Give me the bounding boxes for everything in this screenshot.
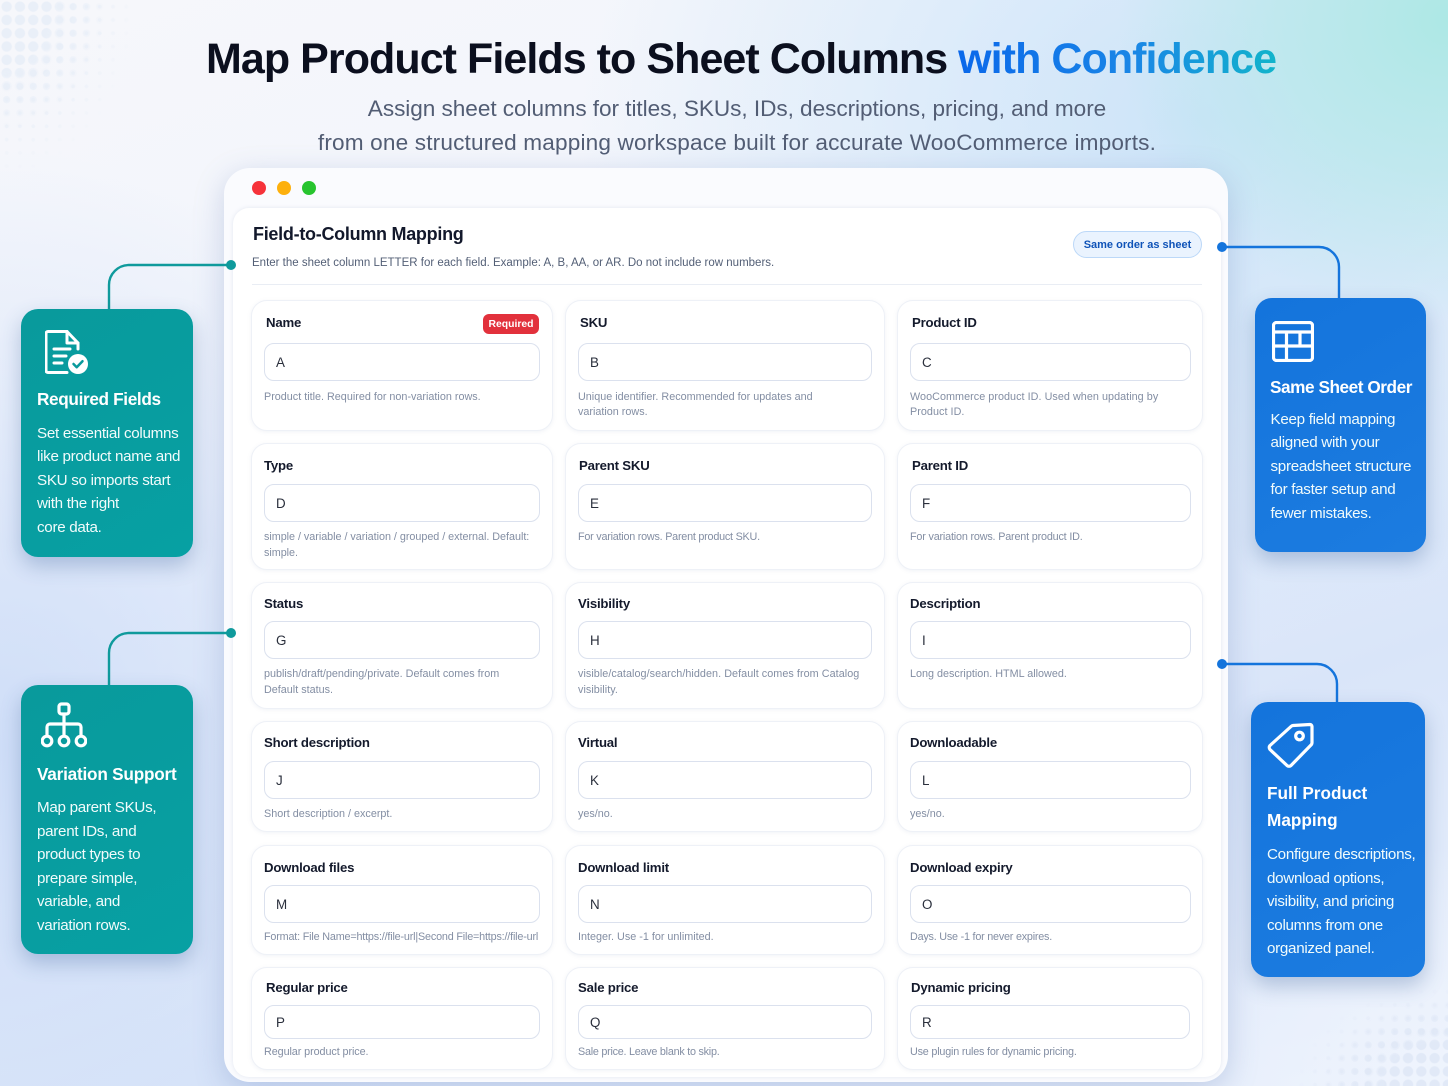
body text: variable, and (37, 893, 120, 910)
input (578, 1005, 872, 1039)
hint (578, 668, 859, 696)
input (578, 885, 872, 923)
field card: Download limit (565, 845, 885, 955)
label: Download limit (578, 860, 669, 875)
label: Sale price (578, 980, 638, 995)
hint: For variation rows. Parent product SKU. (578, 531, 760, 543)
body text: download options, (1267, 870, 1384, 887)
hint: Integer. Use -1 for unlimited. (578, 931, 714, 943)
input: L (922, 772, 929, 788)
body text: visibility, and pricing (1267, 893, 1394, 910)
arrow: same sheet order connector (1217, 242, 1339, 299)
icon: price tag (1268, 722, 1314, 768)
hint: Product title. Required for non-variation rows. (264, 390, 481, 402)
hint: simple / variable / variation / grouped / external. Default: (264, 531, 529, 543)
hint: Use plugin rules for dynamic pricing. (910, 1046, 1077, 1058)
app window (224, 168, 1228, 1082)
badge: same order as sheet (1073, 231, 1202, 258)
hint (578, 390, 813, 418)
input (264, 1005, 540, 1039)
input: A (276, 354, 285, 370)
input (264, 343, 540, 381)
input: I (922, 632, 926, 648)
body text: organized panel. (1267, 940, 1375, 957)
input (910, 484, 1191, 522)
input (578, 621, 872, 659)
input: Q (590, 1014, 600, 1030)
subtitle (318, 96, 1156, 154)
input: F (922, 496, 930, 510)
input (910, 343, 1191, 381)
heading: Variation Support (37, 764, 176, 784)
body text: prepare simple, (37, 870, 137, 887)
input: D (276, 496, 286, 510)
field card: Parent SKU (565, 443, 885, 570)
field card: Sale price (565, 967, 885, 1070)
hint: Default status. (264, 684, 333, 696)
hint: simple. (264, 546, 298, 558)
badge: same order as sheet: Same order as sheet (1084, 239, 1191, 251)
panel instructions: Enter the sheet column LETTER for each field. Example: A, B, AA, or AR. Do not include row numbers. (252, 257, 774, 269)
label: Regular price (266, 980, 348, 995)
body text: Map parent SKUs, (37, 799, 156, 816)
field card: Regular price (251, 967, 553, 1070)
field card: Virtual (565, 721, 885, 832)
label: Short description (264, 735, 370, 750)
body text: like product name and (37, 448, 180, 465)
hint: Days. Use -1 for never expires. (910, 931, 1052, 943)
input (910, 885, 1191, 923)
halftone dots bottom-right (1328, 1016, 1448, 1086)
hint: Unique identifier. Recommended for updates and (578, 390, 813, 402)
icon: document with check (45, 330, 88, 374)
hint (264, 531, 529, 558)
body text: core data. (37, 519, 102, 536)
hint: Long description. HTML allowed. (910, 668, 1067, 680)
input: R (922, 1014, 932, 1030)
hint: yes/no. (578, 808, 613, 820)
arrow: required fields connector (109, 260, 236, 310)
hint: For variation rows. Parent product ID. (910, 531, 1083, 543)
hint: Format: File Name=https://file-url|Second File=https://file-url (264, 931, 538, 943)
input (910, 1005, 1190, 1039)
window control: green (302, 181, 316, 195)
subtitle: Assign sheet columns for titles, SKUs, IDs, descriptions, pricing, and more (368, 96, 1106, 121)
body text: spreadsheet structure (1270, 458, 1411, 475)
heading line 2: Mapping (1267, 810, 1338, 830)
body text: parent IDs, and (37, 823, 136, 840)
body text: fewer mistakes. (1270, 505, 1372, 522)
input: H (590, 632, 600, 648)
field card: SKU (565, 300, 885, 431)
hint: Product ID. (910, 406, 964, 418)
label: Downloadable (910, 735, 997, 750)
body text: Configure descriptions, (1267, 846, 1415, 863)
field card: Name (251, 300, 553, 431)
badge: required (483, 314, 539, 334)
callout: Same Sheet Order (1255, 298, 1426, 552)
badge: required: Required (488, 319, 534, 330)
hint: Short description / excerpt. (264, 808, 392, 820)
field card: Description (897, 582, 1203, 709)
input (578, 761, 872, 799)
hint (264, 668, 499, 696)
arrow: variation support connector (109, 628, 236, 686)
heading: Same Sheet Order (1270, 377, 1412, 397)
icon: hierarchy tree (41, 702, 87, 748)
body text (1267, 846, 1415, 957)
input: P (276, 1014, 285, 1030)
field card: Parent ID (897, 443, 1203, 570)
hint: WooCommerce product ID. Used when updating by (910, 390, 1158, 402)
panel heading: Field-to-Column Mapping (253, 224, 464, 244)
body text: variation rows. (37, 917, 130, 934)
input (264, 885, 540, 923)
field card: Short description (251, 721, 553, 832)
field card: Product ID (897, 300, 1203, 431)
label: Parent ID (912, 458, 968, 473)
input (910, 761, 1191, 799)
body text (1270, 410, 1411, 522)
label: Name (266, 315, 301, 330)
input (264, 484, 540, 522)
field card: Visibility (565, 582, 885, 709)
input: N (590, 896, 600, 912)
label: Download files (264, 860, 354, 875)
heading: Required Fields (37, 389, 161, 409)
hint: Regular product price. (264, 1046, 368, 1058)
label: Type (264, 458, 293, 473)
body text: Set essential columns (37, 424, 178, 442)
hint (910, 390, 1158, 418)
hint: publish/draft/pending/private. Default comes from (264, 668, 499, 680)
label: Download expiry (910, 860, 1013, 875)
body text: for faster setup and (1270, 481, 1395, 498)
input (910, 621, 1191, 659)
body text: with the right (37, 495, 119, 512)
hint: variation rows. (578, 406, 648, 418)
label: Parent SKU (579, 458, 650, 473)
label: SKU (580, 315, 607, 330)
body text: SKU so imports start (37, 472, 170, 489)
input (578, 484, 872, 522)
body text: columns from one (1267, 917, 1383, 934)
hint: visible/catalog/search/hidden. Default comes from Catalog (578, 668, 859, 680)
arrow: full product mapping connector (1217, 659, 1337, 703)
heading: Full Product (1267, 783, 1367, 803)
label: Dynamic pricing (911, 980, 1011, 995)
subtitle: from one structured mapping workspace built for accurate WooCommerce imports. (318, 130, 1156, 154)
window control: amber (277, 181, 291, 195)
field card: Download files (251, 845, 553, 955)
callout: Variation Support (21, 685, 193, 954)
field card: Dynamic pricing (897, 967, 1203, 1070)
halftone dots top-left (2, 2, 102, 128)
body text (37, 799, 156, 934)
field card: Downloadable (897, 721, 1203, 832)
body text: aligned with your (1270, 434, 1379, 451)
field card: Type (251, 443, 553, 570)
hint: yes/no. (910, 808, 945, 820)
callout: Required Fields (21, 309, 193, 557)
input: K (590, 772, 599, 788)
input: O (922, 896, 932, 912)
input: J (276, 772, 283, 788)
hint: visibility. (578, 684, 618, 696)
label: Status (264, 596, 303, 611)
body text (37, 424, 180, 536)
input: E (590, 496, 599, 510)
input: G (276, 632, 286, 648)
title: Map Product Fields to Sheet Columns with Confidence (206, 35, 1276, 83)
body text: Keep field mapping (1270, 410, 1395, 428)
icon: spreadsheet table (1272, 321, 1314, 362)
body text: product types to (37, 846, 140, 863)
field card: Download expiry (897, 845, 1203, 955)
input: B (590, 354, 599, 370)
window control: red (252, 181, 266, 195)
input: C (922, 354, 932, 370)
mapping panel (233, 208, 1221, 1077)
label: Virtual (578, 735, 617, 750)
callout: Full Product Mapping (1251, 702, 1425, 977)
field card: Status (251, 582, 553, 709)
input (578, 343, 872, 381)
label: Product ID (912, 315, 977, 330)
input: M (276, 896, 287, 912)
label: Visibility (578, 596, 630, 611)
label: Description (910, 596, 980, 611)
input (264, 621, 540, 659)
hint: Sale price. Leave blank to skip. (578, 1046, 719, 1058)
input (264, 761, 540, 799)
